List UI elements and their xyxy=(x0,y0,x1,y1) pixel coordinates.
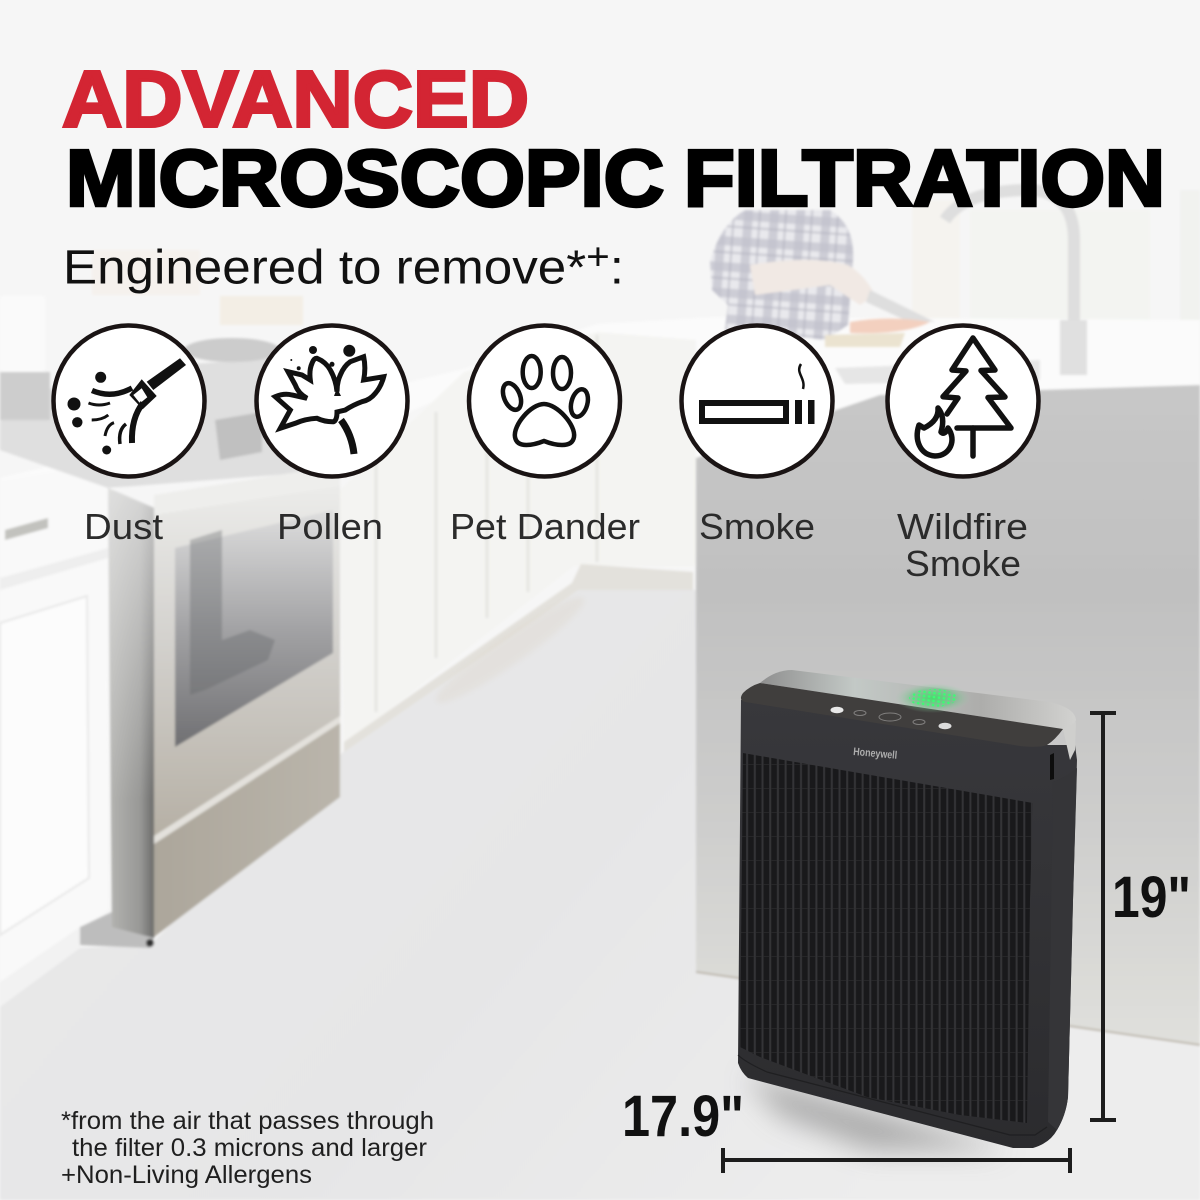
footnote xyxy=(61,1107,434,1189)
woman xyxy=(710,210,853,340)
backsplash items xyxy=(92,250,200,295)
icon: dust xyxy=(54,326,204,476)
forearm xyxy=(750,260,875,305)
reflected legs xyxy=(190,530,275,695)
title line 2: microscopic filtration xyxy=(66,134,1165,222)
baseboard xyxy=(344,564,693,752)
cutting board xyxy=(825,333,905,347)
label: dust: Dust xyxy=(84,506,163,547)
footnote: the filter 0.3 microns and larger xyxy=(72,1134,427,1162)
salmon xyxy=(850,318,930,333)
side slot xyxy=(1050,753,1054,780)
floor tan shadow xyxy=(428,587,592,713)
width dimension: 17.9" xyxy=(622,1084,744,1149)
oven window xyxy=(175,510,333,747)
subtitle: Engineered to remove* xyxy=(63,242,554,294)
icon: paw xyxy=(469,326,620,476)
label: pet dander: Pet Dander xyxy=(450,506,640,547)
faucet xyxy=(945,190,1074,370)
stove foot xyxy=(146,939,154,947)
icon: pollen xyxy=(256,326,408,476)
width dimension xyxy=(622,1084,1070,1173)
icon: cigarette smoke xyxy=(682,326,832,476)
footnote: *from the air that passes through xyxy=(61,1107,434,1135)
floor xyxy=(0,583,1200,1200)
broom head xyxy=(129,379,157,409)
window panes xyxy=(970,210,1150,320)
oven drawer xyxy=(154,722,340,937)
title line 2: microscopic filtration: MICROSCOPIC xyxy=(66,134,664,222)
island wall xyxy=(696,385,1200,1045)
filter grille xyxy=(735,750,1040,1135)
title xyxy=(62,54,1165,222)
far counter xyxy=(0,317,1200,495)
stove side xyxy=(108,488,154,938)
label: wildfire smoke: Wildfire xyxy=(897,506,1028,547)
purifier shadow xyxy=(745,1075,1010,1150)
stove top xyxy=(0,358,340,488)
stove front xyxy=(154,483,340,837)
cabinet handle xyxy=(5,518,48,540)
title line 1: advanced: ADVANCED xyxy=(62,54,529,144)
label: pollen: Pollen xyxy=(277,506,383,547)
icon: wildfire tree xyxy=(888,326,1038,476)
label: wildfire smoke: Smoke xyxy=(905,543,1021,584)
side wash xyxy=(108,488,154,800)
air purifier xyxy=(735,670,1077,1148)
purifier body xyxy=(738,690,1077,1148)
green indicator glow xyxy=(900,685,965,712)
subtitle: + xyxy=(586,236,610,278)
knife xyxy=(866,290,935,322)
purifier black panel xyxy=(741,683,1063,747)
rear cabinets xyxy=(340,332,696,745)
sink xyxy=(835,360,1040,384)
broom handle xyxy=(147,358,186,390)
brand logo: Honeywell xyxy=(853,746,898,762)
glass edge at right xyxy=(1063,722,1076,760)
title line 2: microscopic filtration: FILTRATION xyxy=(684,134,1165,222)
left cabinets xyxy=(0,462,108,982)
control buttons xyxy=(831,707,951,729)
footnote: +Non-Living Allergens xyxy=(61,1161,312,1189)
label: wildfire smoke xyxy=(897,506,1028,584)
label: smoke: Smoke xyxy=(699,506,815,547)
height dimension xyxy=(1090,713,1191,1120)
purifier glass lid xyxy=(760,670,1076,729)
baseboard under left cabinet xyxy=(0,927,80,1007)
subtitle: : xyxy=(610,242,624,294)
